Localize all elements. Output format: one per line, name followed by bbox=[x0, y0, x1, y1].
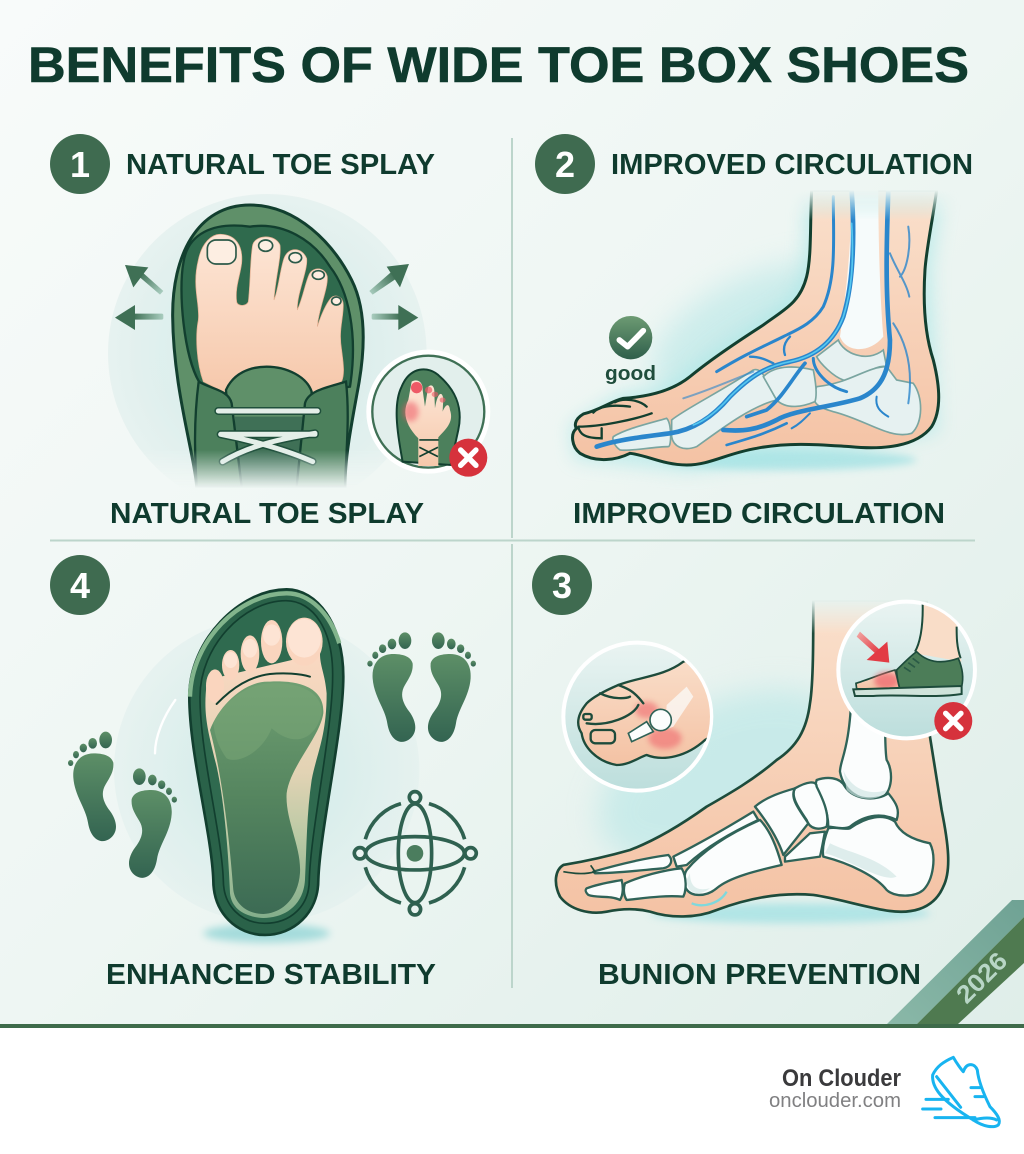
toe pads bbox=[224, 619, 321, 668]
shoe throat shade bbox=[235, 416, 302, 478]
red cross badge bbox=[934, 702, 972, 740]
shoe cavity bbox=[181, 226, 353, 393]
shoe sole bbox=[853, 686, 962, 696]
arrow up-right bbox=[369, 264, 409, 295]
close-up foot bbox=[577, 660, 710, 766]
forefoot bbox=[856, 670, 900, 689]
number badge 1: 1 bbox=[70, 144, 90, 185]
inset inflamed toes bbox=[403, 382, 446, 422]
edge glow bbox=[577, 190, 937, 465]
arrow up-left bbox=[125, 265, 163, 295]
broad glow bbox=[630, 234, 883, 433]
number badge 4: 4 bbox=[70, 565, 90, 606]
caption: enhanced stability: ENHANCED STABILITY bbox=[106, 959, 436, 991]
green sole patch bbox=[210, 681, 323, 914]
panel: enhanced stability bbox=[50, 555, 476, 991]
clipped foot bbox=[577, 660, 710, 766]
illustration: shoe with splayed toes bbox=[108, 194, 488, 513]
foot with veins, fading at the top bbox=[573, 190, 939, 465]
bottom band bbox=[0, 1024, 1024, 1028]
inset: tight shoe bbox=[838, 602, 975, 740]
footprint right top, right foot bbox=[428, 632, 476, 742]
number badge 2 bbox=[535, 134, 595, 194]
bone shading bbox=[687, 770, 897, 893]
toenails bbox=[207, 240, 341, 305]
halo circle bbox=[108, 194, 426, 467]
close-up toes and nail bbox=[583, 685, 643, 743]
brand name: On Clouder bbox=[782, 1065, 901, 1092]
illustration: insole and footprints bbox=[68, 589, 476, 943]
corner ribbon bbox=[887, 900, 1024, 1024]
shoe body bbox=[897, 652, 963, 689]
number badge 3 bbox=[532, 555, 592, 615]
number badge 4 bbox=[50, 555, 110, 615]
toe nail line bbox=[563, 865, 595, 874]
arrow left bbox=[115, 305, 163, 330]
foot bones bbox=[613, 340, 921, 450]
divider lines bbox=[50, 138, 975, 988]
icon: running shoe bbox=[923, 1057, 999, 1127]
footprint left, right foot bbox=[129, 768, 177, 878]
laces bbox=[218, 411, 317, 462]
halo circle bbox=[114, 617, 419, 923]
inset ring bbox=[369, 352, 488, 471]
red cross badge bbox=[449, 439, 487, 477]
arrow right bbox=[372, 305, 418, 330]
foot outline bbox=[573, 190, 939, 465]
inset disc bbox=[838, 602, 975, 738]
panel: improved circulation bbox=[535, 134, 973, 530]
inset: bunion close-up bbox=[563, 643, 723, 791]
inset inner ring bbox=[372, 356, 484, 468]
caption: bunion prevention: BUNION PREVENTION bbox=[598, 959, 921, 991]
label: good: good bbox=[605, 362, 656, 385]
title: BENEFITS OF WIDE TOE BOX SHOES bbox=[28, 37, 969, 93]
red inflammation bbox=[874, 672, 899, 689]
left eyestay bbox=[195, 382, 242, 487]
toes and nail bbox=[578, 400, 652, 438]
gyroscope balance icon bbox=[354, 792, 476, 915]
highlight arc bbox=[155, 700, 175, 753]
footer background bbox=[0, 1028, 1024, 1154]
shoe tongue bbox=[224, 366, 313, 394]
veins bbox=[597, 190, 910, 447]
right eyestay bbox=[297, 382, 348, 487]
inset foot bbox=[405, 380, 451, 466]
foot sole skin bbox=[205, 653, 327, 918]
leg bbox=[915, 603, 962, 662]
shoe laces bbox=[904, 658, 919, 672]
ribbon dark band bbox=[917, 917, 1024, 1024]
leg edges bbox=[915, 603, 961, 658]
panel: natural toe splay bbox=[50, 134, 488, 530]
foot outline bbox=[556, 600, 948, 916]
caption: improved circulation: IMPROVED CIRCULATION bbox=[573, 498, 945, 530]
ground shadow bbox=[663, 450, 917, 470]
inset laces bbox=[419, 440, 439, 457]
shoe upper bbox=[173, 205, 363, 487]
toe base line bbox=[217, 673, 310, 704]
brand block bbox=[769, 1057, 999, 1127]
ground shadow bbox=[650, 903, 930, 923]
footprint right top, left foot bbox=[367, 632, 415, 742]
year label: 2026 bbox=[951, 947, 1013, 1009]
insole rim highlight bbox=[190, 593, 339, 697]
ribbon light band bbox=[887, 900, 1024, 1024]
ground shadow bbox=[203, 924, 330, 943]
number badge 2: 2 bbox=[555, 144, 575, 185]
foot bones bbox=[586, 690, 933, 900]
panel: bunion prevention bbox=[532, 555, 975, 991]
sesamoid arc bbox=[692, 892, 727, 905]
foot, fading at the top bbox=[556, 600, 948, 916]
inset: cramped shoe bbox=[369, 352, 488, 477]
number badge 1 bbox=[50, 134, 110, 194]
broad glow bbox=[571, 654, 875, 899]
heading: improved circulation: IMPROVED CIRCULATION bbox=[611, 149, 973, 181]
clipped shoe bbox=[853, 603, 963, 696]
insole outer bbox=[189, 589, 343, 935]
heading: natural toe splay: NATURAL TOE SPLAY bbox=[126, 149, 435, 181]
toes bbox=[206, 618, 323, 703]
foot with toes bbox=[196, 234, 344, 393]
inset disc bbox=[563, 643, 711, 791]
red pressure arrow bbox=[857, 632, 889, 663]
number badge 3: 3 bbox=[552, 565, 572, 606]
good check badge bbox=[609, 316, 652, 359]
caption: natural toe splay: NATURAL TOE SPLAY bbox=[110, 498, 424, 530]
tibia highlight bbox=[840, 190, 883, 349]
vein highlights bbox=[693, 223, 852, 425]
inset shoe bbox=[397, 369, 460, 465]
illustration: foot with veins bbox=[573, 190, 939, 470]
inflammation bbox=[635, 702, 682, 749]
brand url: onclouder.com bbox=[769, 1090, 901, 1112]
close-up bones bbox=[628, 687, 693, 742]
illustration: foot skeleton bbox=[556, 600, 975, 923]
ball of foot shading bbox=[213, 683, 322, 760]
footprint left, left foot bbox=[68, 732, 116, 841]
insole inner bbox=[200, 601, 333, 923]
shoe with foot bbox=[173, 205, 363, 487]
